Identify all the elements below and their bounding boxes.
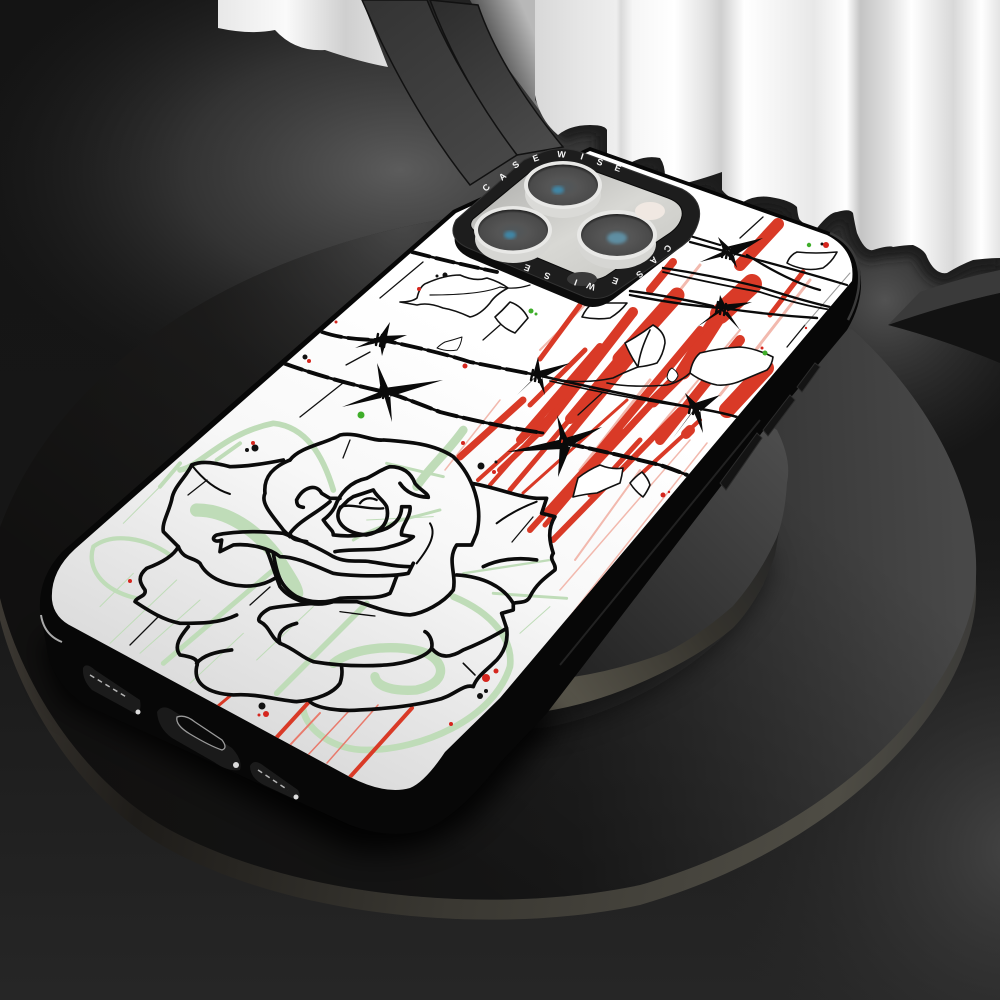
red paint drips bbox=[218, 224, 810, 777]
lens: right bbox=[577, 210, 657, 269]
white curtain, top right bbox=[535, 0, 1000, 273]
printed artwork bbox=[92, 217, 850, 777]
leaf bud bbox=[667, 368, 678, 382]
barb knots bbox=[376, 247, 732, 450]
camera glass bbox=[471, 162, 682, 280]
rose centre bbox=[214, 532, 413, 576]
curtain floor shadow bbox=[558, 125, 1000, 273]
barbed wire strands bbox=[283, 236, 847, 477]
camera bumper bbox=[453, 149, 700, 298]
small pedestal disc bbox=[400, 380, 788, 730]
phone bbox=[40, 147, 861, 834]
leaf vein: upper left bbox=[430, 285, 530, 295]
leaf: right large bbox=[690, 347, 773, 385]
dark stand, right bbox=[888, 270, 1000, 363]
disc lower shade bbox=[0, 218, 976, 900]
disc rim bbox=[0, 238, 976, 920]
white curtain, top left bbox=[218, 0, 388, 67]
pedestal rim bbox=[547, 483, 787, 711]
disc top light bbox=[0, 218, 976, 900]
phone body bbox=[40, 147, 861, 834]
leaves on wire bbox=[400, 252, 837, 497]
speaker left bbox=[83, 665, 140, 714]
leaf: small mid bbox=[437, 337, 462, 351]
flash bbox=[635, 202, 665, 220]
pedestal shadow bbox=[400, 420, 770, 730]
dark stand arcs behind phone bbox=[362, 0, 563, 185]
phone screen face bbox=[52, 151, 852, 790]
large round disc bbox=[0, 218, 976, 920]
curtain shadow gap bbox=[470, 0, 558, 135]
lens: top bbox=[524, 161, 602, 218]
leaf: upper left bbox=[400, 275, 508, 317]
disc top bbox=[0, 218, 976, 900]
lens: left bbox=[474, 206, 552, 263]
leaf: centre bbox=[625, 325, 665, 367]
brand text top: CASEWISE bbox=[480, 149, 622, 193]
paint splatter dots bbox=[128, 242, 829, 726]
phone corner gloss bbox=[41, 615, 62, 642]
sensor bbox=[567, 272, 597, 286]
leaf stem: right bbox=[607, 373, 690, 386]
side buttons bbox=[720, 363, 820, 490]
charging port bbox=[157, 707, 241, 770]
pedestal top bbox=[500, 380, 788, 677]
camera bumper shadow bbox=[455, 215, 699, 307]
brand text bottom: CASEWISE bbox=[523, 243, 674, 293]
ink drips bbox=[130, 217, 850, 645]
speaker right bbox=[250, 762, 300, 800]
phone top right gloss bbox=[830, 233, 859, 320]
leaf stem: centre bbox=[550, 330, 650, 382]
green graffiti artwork bbox=[92, 423, 567, 750]
phone side highlight bbox=[560, 420, 760, 665]
rose line drawing bbox=[135, 434, 555, 710]
camera island bbox=[453, 149, 700, 307]
leaf: small under camera bbox=[495, 302, 528, 333]
bottom ports bbox=[83, 665, 300, 800]
leaf: under camera right bbox=[582, 303, 627, 319]
leaf: lower wire small bbox=[630, 472, 650, 497]
leaf: lower wire bbox=[573, 465, 623, 497]
phone shadow bbox=[40, 600, 560, 852]
wire barbs bbox=[342, 237, 763, 477]
leaf: top right bbox=[787, 252, 837, 270]
